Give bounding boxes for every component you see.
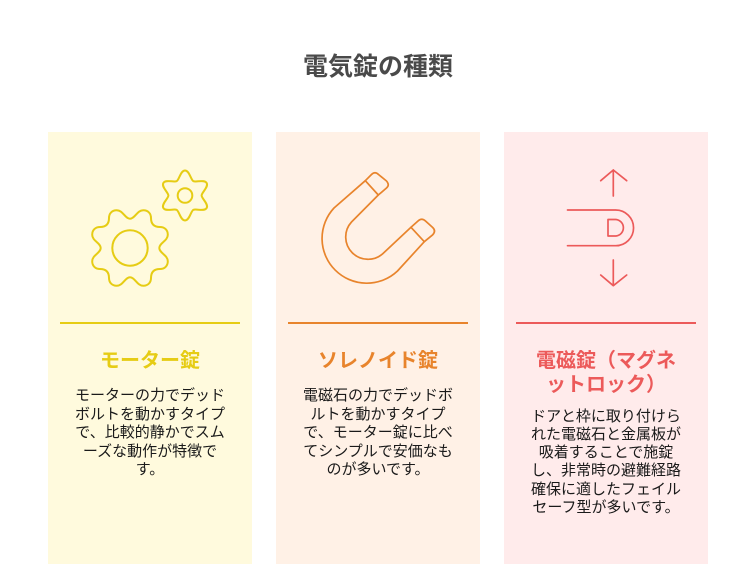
heading: ソレノイド錠: ソレノイド錠	[318, 350, 438, 372]
text block: ソレノイド錠: 電磁石の力でデッドボ	[303, 387, 453, 404]
panel: ソレノイド錠	[276, 132, 480, 564]
text block: 電磁錠: 確保に適したフェイル	[531, 481, 681, 498]
title: 電気錠の種類	[303, 53, 453, 81]
text block: ソレノイド錠: のが多いです。	[326, 461, 430, 478]
panel: 電磁錠	[504, 132, 708, 564]
text block: ソレノイド錠: てシンプルで安価なも	[303, 442, 453, 460]
text block: モーター錠: ボルトを動かすタイプ	[75, 406, 225, 422]
divider	[288, 322, 468, 324]
text block: 電磁錠: ドアと枠に取り付けら	[531, 408, 681, 424]
text block: 電磁錠	[531, 408, 681, 516]
heading: 電磁錠: 電磁錠（マグネ	[536, 350, 676, 372]
text block: ソレノイド錠: で、モーター錠に比べ	[303, 424, 453, 441]
text block: モーター錠: で、比較的静かでスム	[75, 424, 225, 441]
text block: ソレノイド錠: ルトを動かすタイプ	[310, 406, 446, 422]
text block: モーター錠	[75, 387, 225, 478]
heading: 電磁錠	[536, 350, 676, 396]
text block: 電磁錠: 吸着することで施錠	[539, 444, 673, 461]
text block: ソレノイド錠	[303, 387, 453, 478]
icon: small gear	[163, 170, 207, 220]
text block: 電磁錠: セーフ型が多いです。	[532, 499, 680, 516]
panel: モーター錠	[48, 132, 252, 564]
divider	[516, 322, 696, 324]
text block: 電磁錠: れた電磁石と金属板が	[531, 426, 681, 443]
text block: モーター錠: モーターの力でデッド	[75, 387, 225, 404]
icon: large gear	[92, 210, 168, 286]
icon: magnetic lock bolt with arrows	[568, 170, 634, 286]
text block: 電磁錠: し、非常時の避難経路	[531, 462, 681, 479]
heading: 電磁錠: ットロック）	[546, 374, 666, 396]
icon: horseshoe magnet	[322, 173, 434, 283]
icon: gears	[92, 170, 207, 286]
icon: bolt	[568, 210, 634, 246]
arrow: up	[601, 170, 627, 196]
heading: モーター錠: モーター錠	[100, 350, 200, 372]
text block: モーター錠: ーズな動作が特徴で	[83, 442, 217, 460]
text block: モーター錠: す。	[136, 461, 164, 478]
divider	[60, 322, 240, 324]
arrow: down	[601, 260, 627, 286]
